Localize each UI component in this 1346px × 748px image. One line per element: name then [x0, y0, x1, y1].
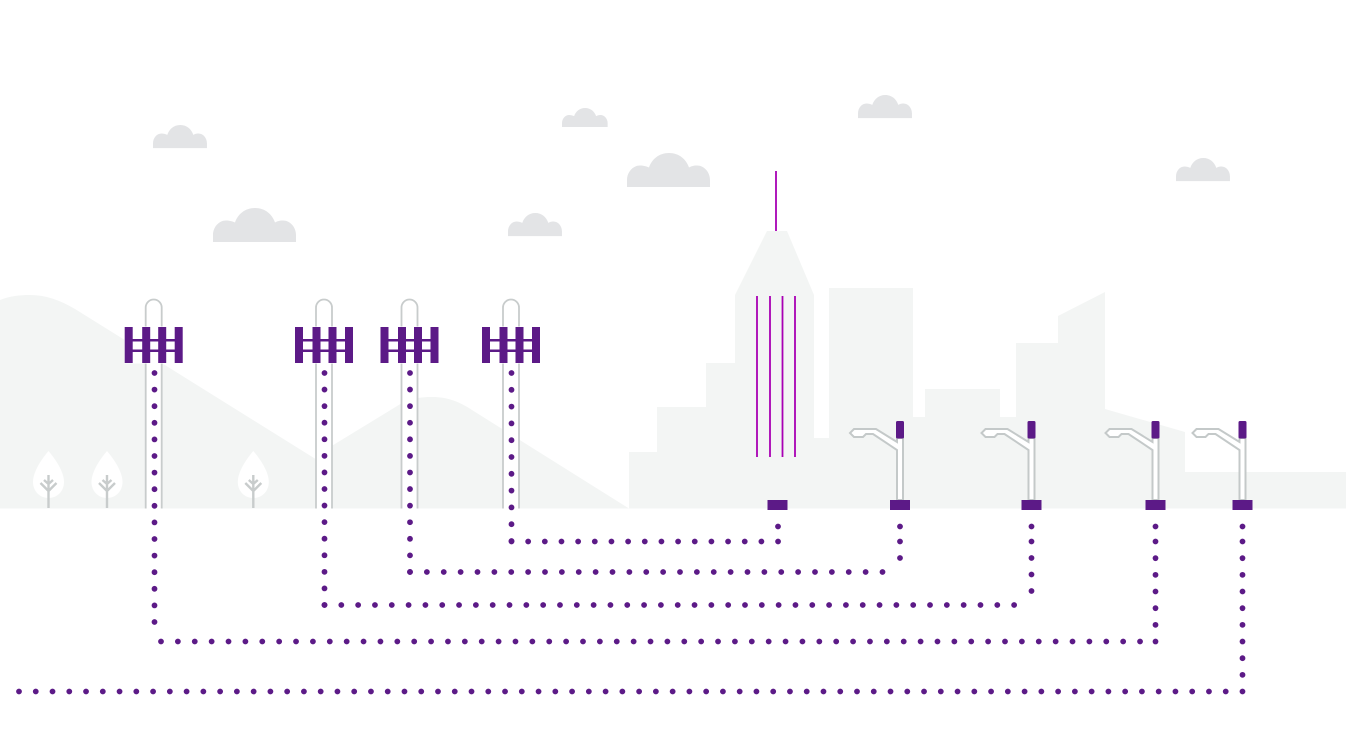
tree 2 — [92, 451, 122, 508]
cell tower 3 — [380, 300, 439, 508]
tower antenna lines — [757, 171, 795, 457]
tower base block — [768, 500, 788, 510]
cell tower 2 — [294, 300, 354, 508]
trees — [33, 451, 269, 508]
lamp 2 — [982, 421, 1042, 510]
connection 2 — [410, 373, 900, 572]
cell tower 4 — [482, 300, 540, 508]
lamp 1 — [850, 421, 910, 510]
mountains — [0, 295, 629, 508]
clouds — [153, 95, 1230, 242]
connection 4 — [154, 373, 1156, 642]
lamp 4 — [1192, 421, 1252, 510]
connection 1 — [512, 373, 778, 542]
cell tower 1 — [124, 300, 183, 508]
lamp 3 — [1106, 421, 1166, 510]
dotted connection lines — [19, 373, 1243, 692]
tree 3 — [238, 451, 269, 508]
connection 5 — [19, 526, 1243, 692]
cell towers — [124, 300, 540, 508]
city skyline — [629, 231, 1346, 508]
connection 3 — [324, 373, 1032, 605]
tree 1 — [33, 451, 64, 508]
street lamps — [850, 421, 1252, 510]
